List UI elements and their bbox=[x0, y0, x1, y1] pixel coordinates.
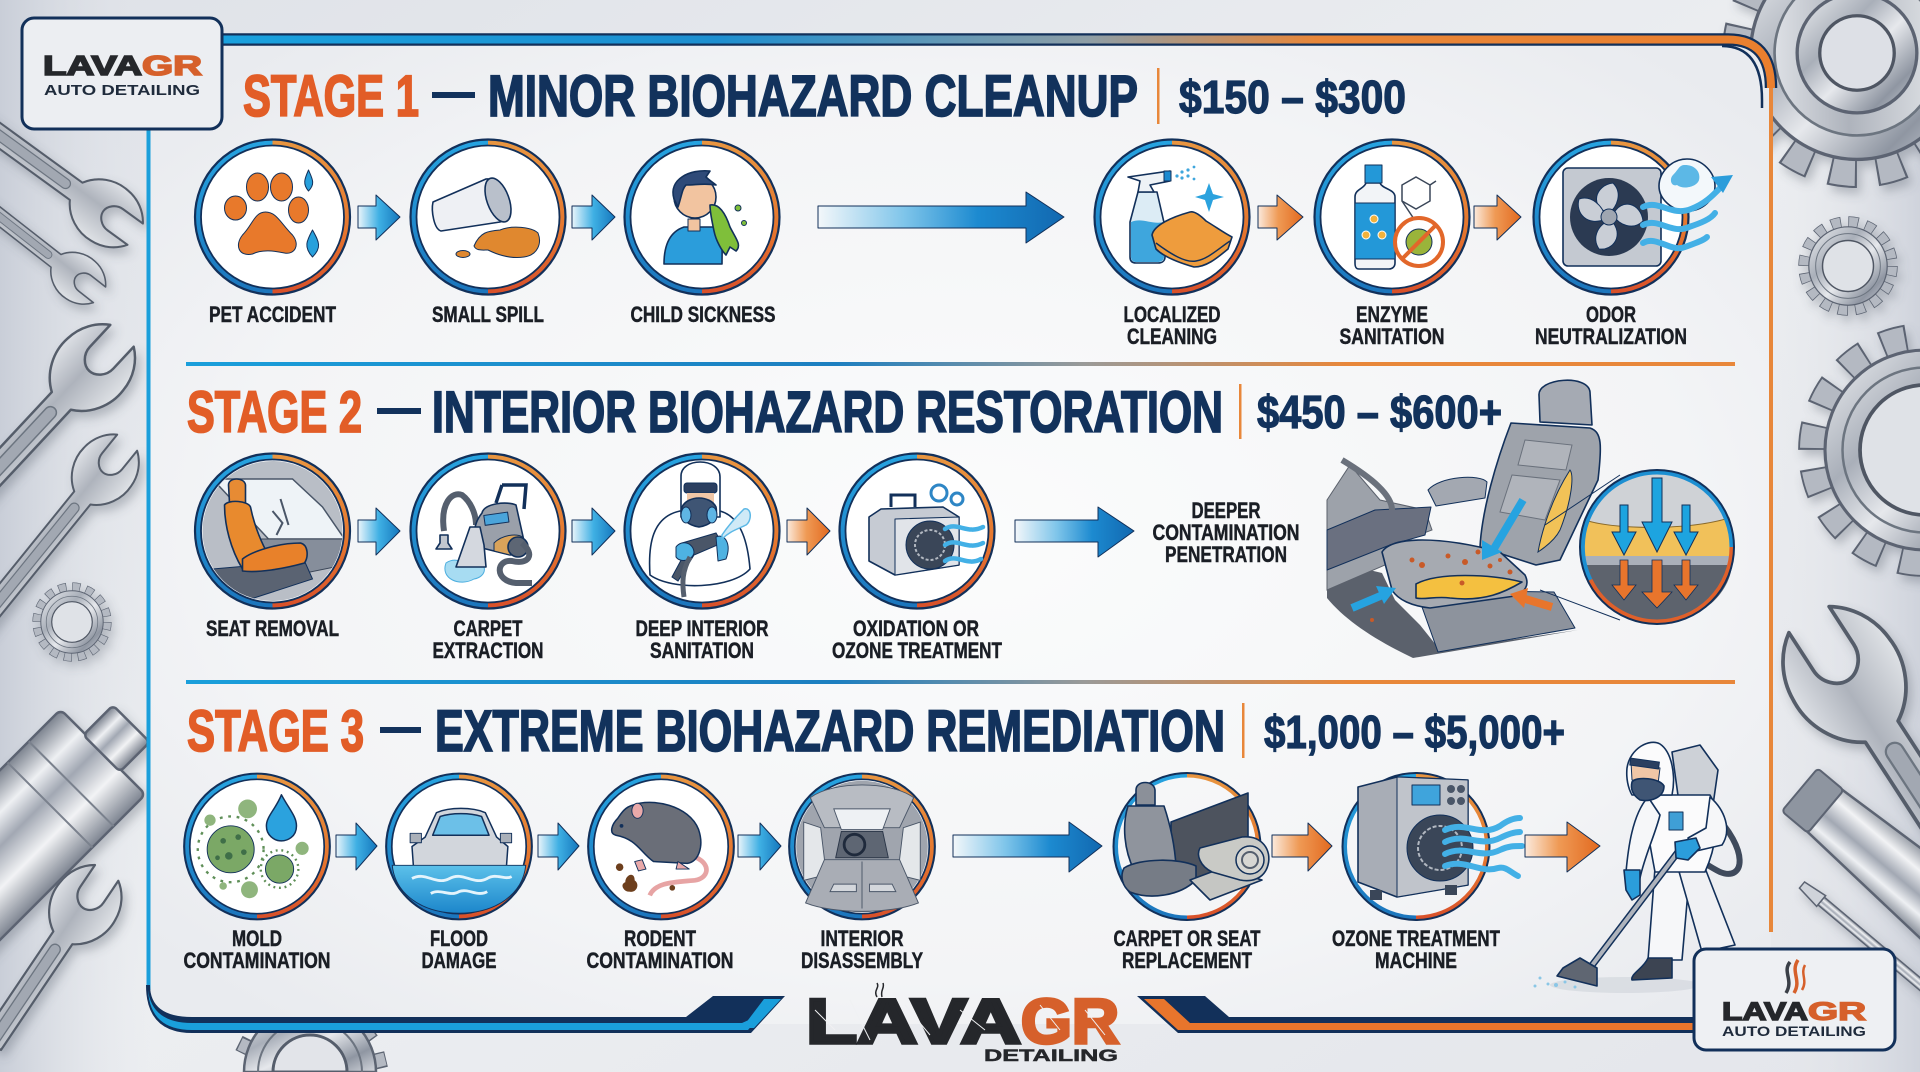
logo: top left badge: GR bbox=[142, 50, 202, 81]
panel: stage 1 bbox=[195, 64, 1733, 349]
stage 2 labels bbox=[206, 498, 1300, 663]
icon: seat removal bbox=[195, 454, 350, 608]
logo: top left badge bbox=[22, 18, 222, 129]
stage 2 labels: DEEP INTERIOR bbox=[636, 616, 769, 641]
arrow bbox=[738, 823, 781, 870]
icon: flood damage bbox=[386, 774, 532, 919]
logo: bottom right badge bbox=[1694, 949, 1895, 1050]
stage 1 labels: LOCALIZED bbox=[1124, 302, 1220, 327]
divider: stage 2 and 3 bbox=[186, 680, 1735, 684]
tools: left side decoration bbox=[0, 120, 146, 1058]
frame: top and right border bbox=[148, 40, 1771, 990]
logo: center footer: LAVA bbox=[806, 987, 1021, 1057]
stage 1 labels: PET ACCIDENT bbox=[209, 302, 336, 327]
icon: ozone treatment bbox=[840, 454, 994, 608]
stage 3 labels: FLOOD bbox=[430, 926, 488, 951]
stage 2 labels: EXTRACTION bbox=[432, 638, 544, 663]
stage 2 labels: CONTAMINATION bbox=[1152, 520, 1300, 545]
stage 1 labels: NEUTRALIZATION bbox=[1535, 324, 1687, 349]
stage 1 labels: SMALL SPILL bbox=[432, 302, 544, 327]
stage 3 labels: DAMAGE bbox=[422, 948, 496, 973]
stage 3 labels: DISASSEMBLY bbox=[801, 948, 923, 973]
stage 2 labels: SANITATION bbox=[650, 638, 754, 663]
logo: center footer: GR bbox=[1021, 987, 1119, 1057]
callout: penetration detail circle bbox=[1580, 470, 1734, 624]
stage 1 labels: CHILD SICKNESS bbox=[630, 302, 776, 327]
logo: center footer: DETAILING bbox=[984, 1046, 1118, 1065]
heading: stage 1: $150 – $300 bbox=[1179, 71, 1406, 123]
long arrow: to replacement bbox=[953, 822, 1102, 872]
arrow bbox=[358, 508, 400, 555]
tool: bottom gear bbox=[239, 997, 386, 1072]
icon: carpet or seat replacement bbox=[1114, 773, 1269, 920]
illustration: contaminated car seat bbox=[1327, 380, 1734, 658]
stage 3 labels: MACHINE bbox=[1375, 948, 1457, 973]
logo: center footer bbox=[806, 983, 1119, 1065]
stage 2 labels: OZONE TREATMENT bbox=[832, 638, 1002, 663]
heading: stage 3: $1,000 – $5,000+ bbox=[1264, 706, 1565, 758]
logo: bottom right badge: AUTO DETAILING bbox=[1722, 1023, 1866, 1039]
frame: bottom right swoosh bbox=[1137, 996, 1700, 1033]
logo: top left badge: LAVA bbox=[43, 50, 142, 81]
logo: bottom right badge: LAVA bbox=[1722, 998, 1808, 1026]
heading: stage 1: MINOR BIOHAZARD CLEANUP bbox=[488, 64, 1138, 129]
long arrow: to deeper contamination bbox=[1015, 507, 1134, 557]
stage 1 labels: ODOR bbox=[1586, 302, 1636, 327]
icon: enzyme sanitation bbox=[1314, 140, 1470, 294]
long arrow: causes to treatment bbox=[818, 192, 1064, 243]
icon: deep interior sanitation bbox=[624, 454, 780, 608]
divider: stage 1 and 2 bbox=[186, 362, 1735, 366]
stage 2 labels: SEAT REMOVAL bbox=[206, 616, 339, 641]
icon: odor neutralization fan bbox=[1534, 140, 1733, 294]
stage 3 labels: OZONE TREATMENT bbox=[1332, 926, 1500, 951]
arrow bbox=[1474, 195, 1521, 240]
icon: ozone treatment machine bbox=[1342, 773, 1522, 920]
icon: mold contamination bbox=[184, 774, 330, 919]
icon: small spill cup bbox=[410, 140, 566, 294]
frame: bottom left swoosh bbox=[146, 985, 785, 1033]
stage 3 labels: INTERIOR bbox=[820, 926, 904, 951]
icon: carpet extraction bbox=[410, 454, 566, 608]
stage 3 labels: CONTAMINATION bbox=[586, 948, 734, 973]
arrow bbox=[787, 508, 830, 555]
arrow bbox=[1258, 195, 1303, 240]
panel: stage 2 bbox=[187, 380, 1734, 663]
icon: localized cleaning bbox=[1094, 140, 1250, 294]
icon: interior disassembly bbox=[789, 774, 935, 919]
arrow bbox=[358, 195, 400, 240]
arrow bbox=[1272, 823, 1332, 871]
stage 2 labels: CARPET bbox=[454, 616, 523, 641]
stage 3 labels: CONTAMINATION bbox=[184, 948, 330, 973]
heading: stage 3: EXTREME BIOHAZARD REMEDIATION bbox=[435, 699, 1225, 764]
stage 1 labels bbox=[209, 302, 1687, 349]
stage 2 labels: PENETRATION bbox=[1165, 542, 1287, 567]
arrow bbox=[336, 823, 377, 870]
stage 3 labels: MOLD bbox=[232, 926, 282, 951]
stage 2 labels: DEEPER bbox=[1192, 498, 1261, 523]
tools: right side decoration bbox=[1740, 0, 1920, 1033]
stage 3 labels: RODENT bbox=[624, 926, 696, 951]
arrow bbox=[572, 195, 615, 240]
illustration: technician in protective suit vacuuming bbox=[1534, 742, 1740, 993]
heading: stage 1: STAGE 1 bbox=[243, 64, 419, 129]
panel: stage 3 bbox=[184, 699, 1740, 993]
arrow bbox=[538, 823, 579, 870]
stage 1 labels: CLEANING bbox=[1127, 324, 1217, 349]
stage 3 labels: REPLACEMENT bbox=[1122, 948, 1252, 973]
stage 2 labels: OXIDATION OR bbox=[853, 616, 979, 641]
stage 3 labels bbox=[184, 926, 1500, 973]
stage 1 labels: SANITATION bbox=[1340, 324, 1444, 349]
stage 1 labels: ENZYME bbox=[1356, 302, 1428, 327]
icon: child sickness bbox=[624, 140, 780, 294]
logo: bottom right badge: GR bbox=[1808, 998, 1866, 1026]
icon: rodent contamination bbox=[588, 774, 734, 919]
arrow bbox=[572, 508, 615, 555]
stage 3 labels: CARPET OR SEAT bbox=[1114, 926, 1261, 951]
icon: pet accident paw bbox=[195, 140, 350, 294]
panel: main white board bbox=[149, 44, 1771, 1024]
heading: stage 2: STAGE 2 bbox=[187, 380, 362, 445]
logo: top left badge: AUTO DETAILING bbox=[44, 82, 200, 99]
heading: stage 2: $450 – $600+ bbox=[1257, 386, 1502, 438]
heading: stage 2: INTERIOR BIOHAZARD RESTORATION bbox=[432, 380, 1223, 445]
heading: stage 3: STAGE 3 bbox=[187, 699, 364, 764]
arrow bbox=[1525, 822, 1600, 872]
